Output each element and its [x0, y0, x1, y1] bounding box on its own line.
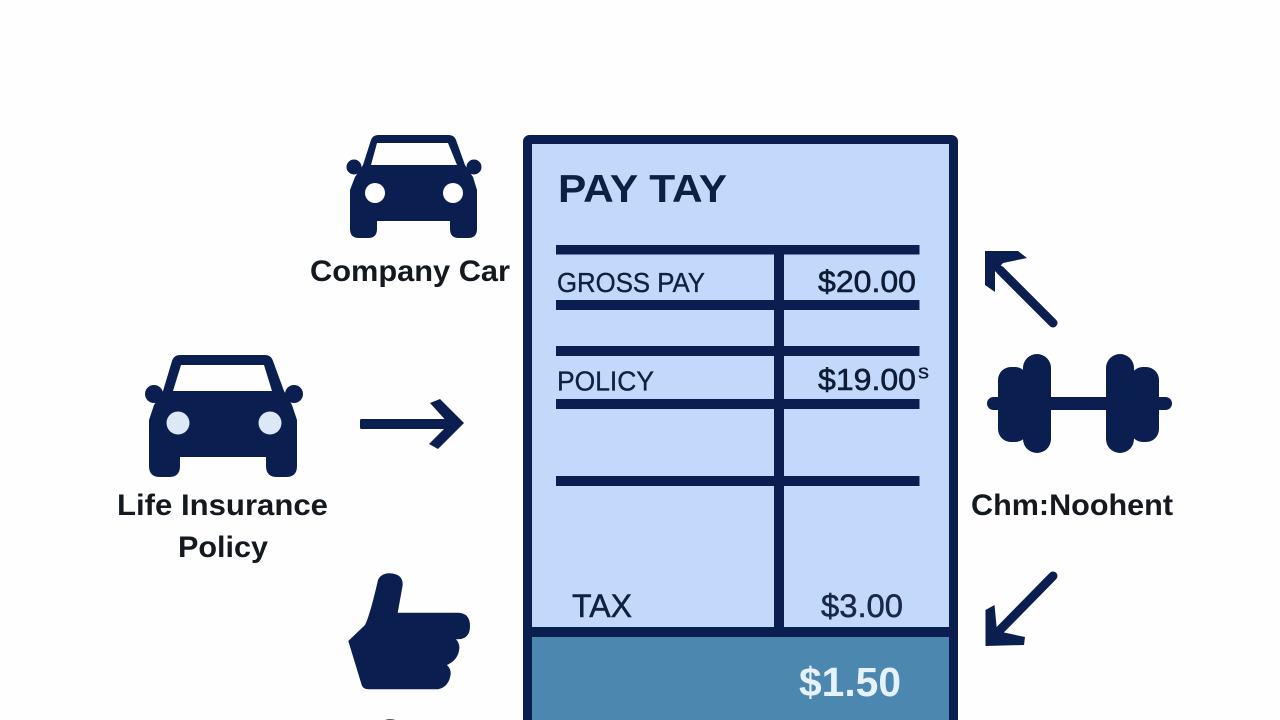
- row: tax label: TAX: [572, 588, 632, 624]
- label: life insurance policy: Life Insurance: [117, 489, 328, 522]
- label: life insurance policy: [117, 489, 328, 564]
- row: gross pay label: GROSS PAY: [557, 267, 705, 298]
- pay slip table lines: [532, 245, 949, 637]
- row: policy amount suffix: s: [918, 362, 929, 384]
- panel: pay slip: [528, 140, 954, 720]
- arrow: up-left, away from pay slip: [985, 251, 1053, 323]
- label: company car: Company Car: [310, 255, 511, 288]
- icon: thumbs up: [348, 573, 470, 689]
- net pay amount: $1.50: [799, 659, 901, 705]
- row: policy label: POLICY: [557, 366, 654, 396]
- net pay band: [532, 637, 949, 720]
- row: policy amount: $19.00: [818, 362, 916, 397]
- arrow: right, toward pay slip: [360, 399, 464, 449]
- icon: dumbbell: [987, 354, 1172, 453]
- pay slip frame: [528, 140, 954, 720]
- label: life insurance policy: Policy: [178, 531, 268, 564]
- row: gross pay amount: $20.00: [818, 264, 916, 299]
- row: tax amount: $3.00: [821, 588, 903, 624]
- label: gym membership garbled: Chm:Noohent: [971, 489, 1173, 522]
- icon: company car: [346, 135, 482, 238]
- icon: life insurance car: [145, 355, 303, 477]
- arrow: down-left, toward pay slip: [986, 576, 1053, 646]
- pay slip title: PAY TAY: [558, 168, 727, 211]
